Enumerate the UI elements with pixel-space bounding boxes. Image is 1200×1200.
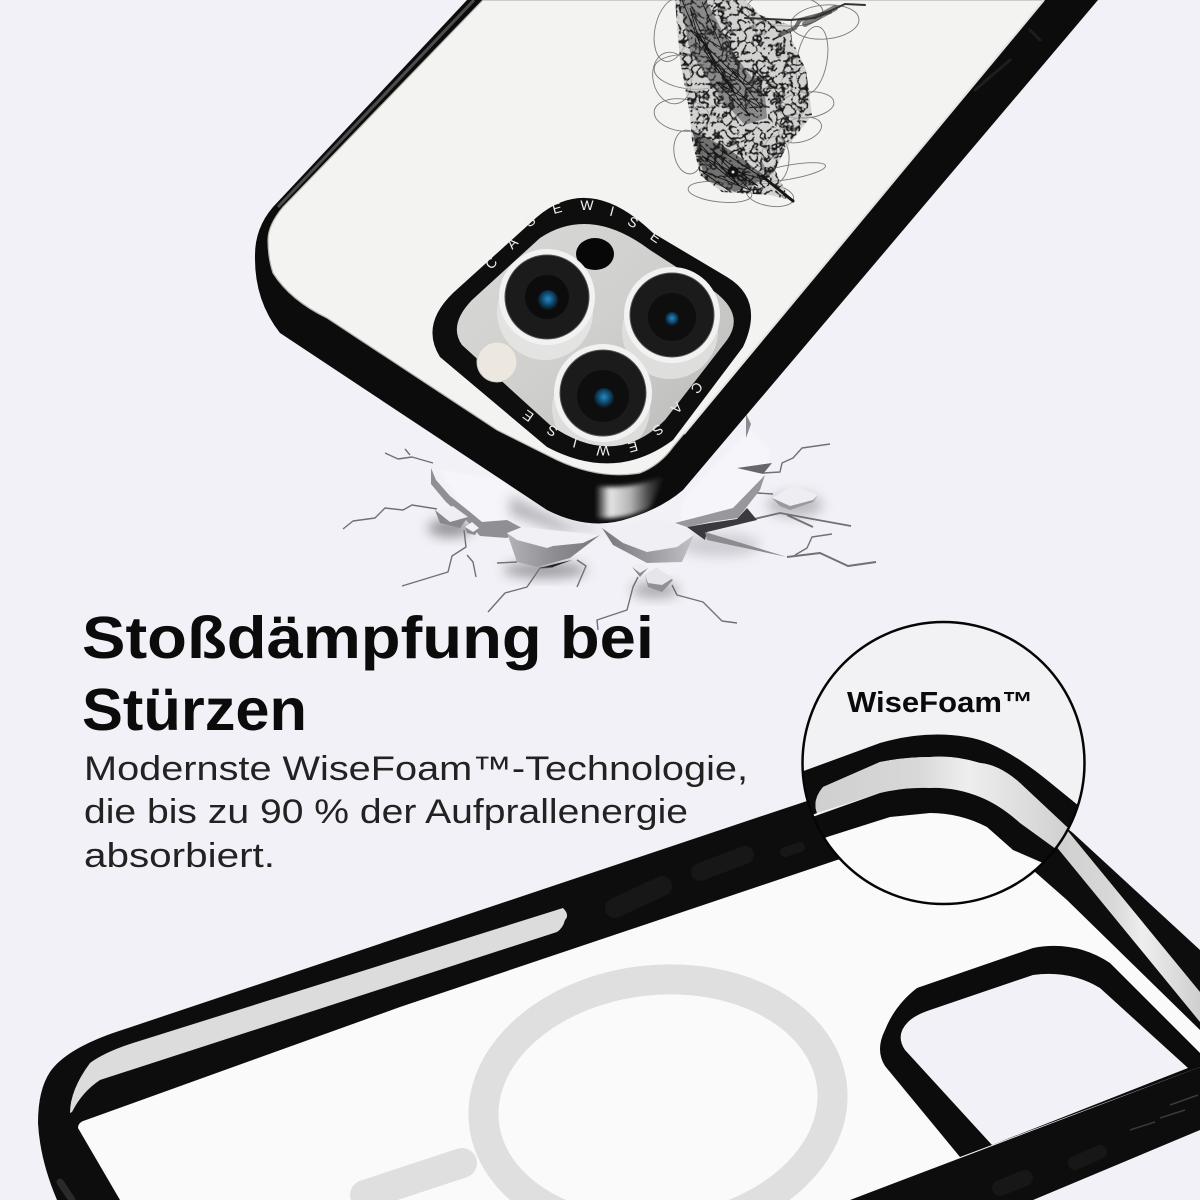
lens bodies <box>497 300 718 446</box>
camera plateau <box>457 224 734 446</box>
CASEWISE lettering: E <box>520 407 536 425</box>
description text: absorbiert. <box>84 837 275 875</box>
CASEWISE lettering: E <box>648 228 664 246</box>
side buttons <box>615 847 1100 1188</box>
CASEWISE lettering: S <box>544 422 560 440</box>
camera bumper ring <box>432 197 751 463</box>
scribble loops <box>648 0 860 210</box>
description text: die bis zu 90 % der Aufprallenergie <box>84 793 688 831</box>
ground shadows <box>428 430 823 598</box>
magnified inner band <box>814 788 1054 862</box>
description text <box>84 750 748 875</box>
magnifier circle: WiseFoam <box>790 622 1090 920</box>
case frame <box>38 763 1200 1200</box>
CASEWISE lettering: W <box>580 197 594 213</box>
bottom case interior view <box>38 763 1200 1200</box>
microphone hole <box>576 238 614 270</box>
rock B <box>602 520 694 563</box>
headline <box>82 605 654 743</box>
magnified case corner <box>804 734 1077 862</box>
side highlight <box>684 0 1044 434</box>
CASEWISE lettering <box>482 197 706 459</box>
camera cutout frame <box>880 946 1200 1157</box>
CASEWISE lettering: W <box>596 443 610 459</box>
CASEWISE lettering: A <box>503 234 521 252</box>
right wall and dark gap <box>675 414 787 557</box>
charging port hole <box>60 1182 72 1200</box>
CASEWISE lettering: E <box>626 438 640 456</box>
magnifier outline <box>802 622 1084 904</box>
alignment pill <box>365 1163 462 1195</box>
CASEWISE lettering: I <box>571 435 579 451</box>
lens one <box>499 249 595 345</box>
lower right texture <box>1130 1095 1198 1130</box>
CASEWISE lettering: S <box>625 213 641 231</box>
left wall <box>431 468 522 538</box>
bird eye <box>728 166 738 178</box>
magnifier background <box>802 622 1084 904</box>
CASEWISE lettering: S <box>522 212 538 230</box>
cracked ground impact <box>343 414 876 630</box>
small left rocks <box>435 506 479 535</box>
magnifier label: WiseFoam™ <box>847 687 1033 719</box>
frame highlight <box>278 0 474 207</box>
phone back panel <box>268 0 1044 475</box>
scribble bird artwork <box>648 0 865 210</box>
bird tail <box>745 4 865 35</box>
bird head <box>692 130 768 192</box>
top phone in transparent case <box>255 0 1098 523</box>
description text: Modernste WiseFoam™-Technologie, <box>84 750 748 788</box>
case frame <box>255 0 1098 523</box>
magnified foam <box>815 757 1070 850</box>
CASEWISE lettering: S <box>650 421 666 439</box>
bottom rocks <box>632 563 673 592</box>
right rock <box>772 485 818 510</box>
CASEWISE lettering: I <box>608 203 616 219</box>
black bumper <box>432 198 751 463</box>
magnified outer band <box>804 734 1077 828</box>
flash <box>477 342 517 382</box>
CASEWISE lettering: C <box>688 379 706 397</box>
frame gloss <box>596 476 664 518</box>
left foam strip <box>70 908 567 1113</box>
CASEWISE lettering: E <box>550 199 564 217</box>
CASEWISE lettering: C <box>482 254 500 272</box>
bird body <box>675 0 812 200</box>
headline: Stürzen <box>82 677 307 743</box>
camera cutout <box>901 974 1188 1145</box>
lens three <box>554 344 652 442</box>
magnet ring <box>471 962 845 1200</box>
side buttons <box>975 30 1040 90</box>
clear back panel <box>78 830 1200 1200</box>
magnified interior <box>790 813 1050 920</box>
headline: Stoßdämpfung bei <box>82 605 654 671</box>
right foam strip <box>1055 830 1200 1022</box>
bird wing <box>680 0 767 125</box>
CASEWISE lettering: A <box>668 399 686 417</box>
bird beak <box>762 176 793 201</box>
lens two <box>624 267 720 363</box>
crack lines <box>343 444 876 630</box>
rock A <box>507 527 600 568</box>
